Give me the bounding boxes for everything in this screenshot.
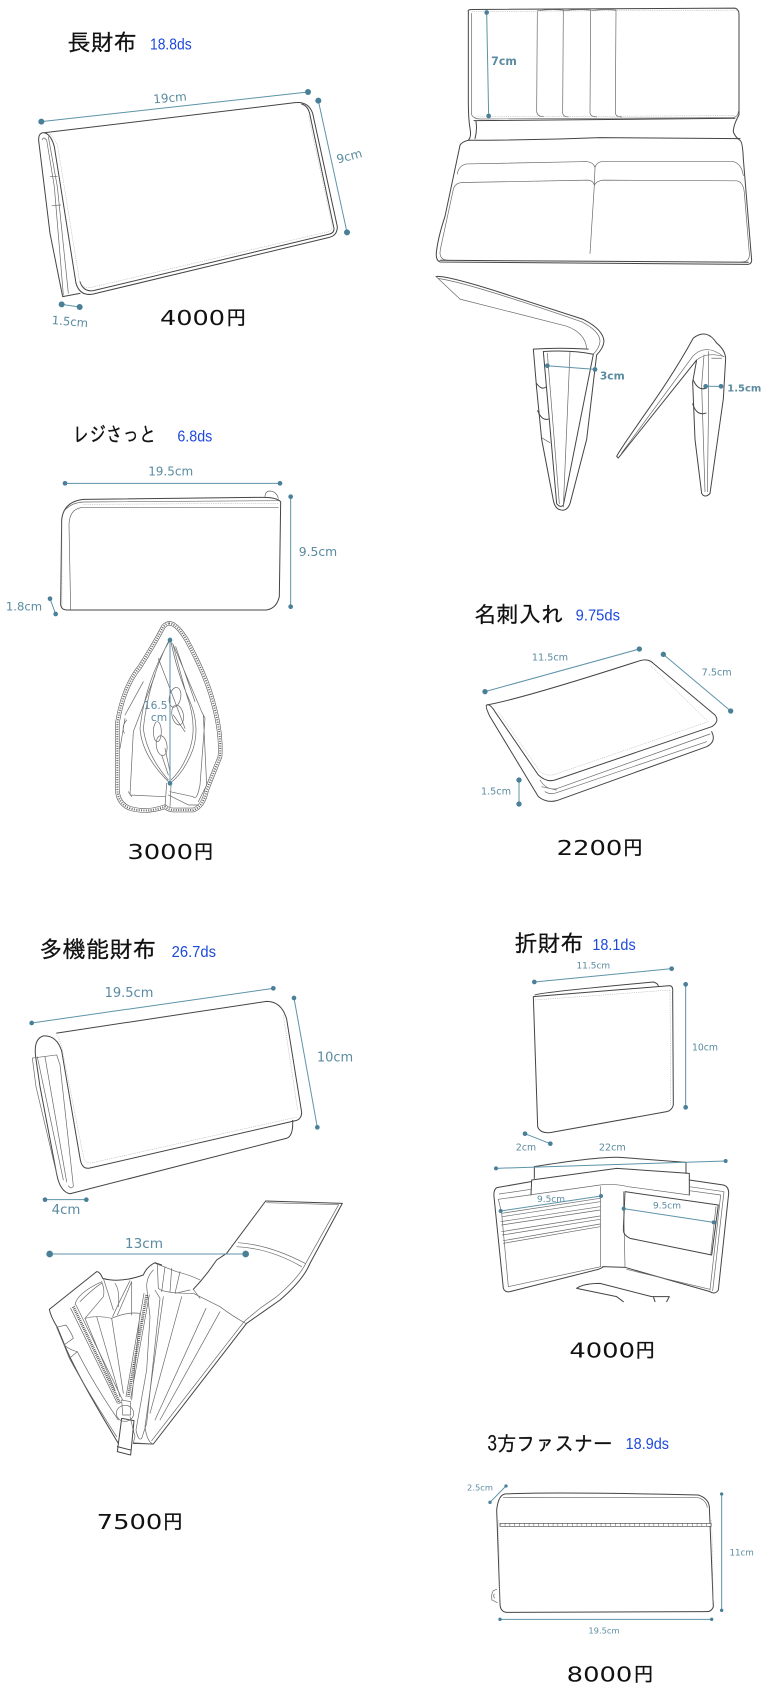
dimension: 1.5cm: 1.5cm bbox=[51, 313, 89, 330]
price: 4000 yen bbox=[569, 1338, 656, 1362]
dimension: 1.5cm side bbox=[703, 383, 761, 394]
dimension: 9.5cm right: 9.5cm bbox=[653, 1201, 681, 1211]
panel: three-sided zip wallet bbox=[467, 1434, 754, 1684]
heading: three-sided zip wallet: 3方ファスナー bbox=[487, 1434, 612, 1454]
drawing: side view open bbox=[436, 276, 604, 510]
drawing: fanned wallet right half and flap bbox=[133, 1201, 342, 1444]
panel: long wallet bbox=[38, 31, 364, 330]
heading: three-sided zip wallet: 18.9ds bbox=[626, 1436, 669, 1453]
dimension: 19.5cm: 19.5cm bbox=[148, 465, 193, 479]
dimension: 19cm bbox=[38, 89, 311, 125]
heading: multifunction wallet: 26.7ds bbox=[172, 944, 216, 961]
heading: L-zip wallet bbox=[73, 424, 213, 445]
price: 2200 yen: 円 bbox=[623, 838, 643, 858]
dimension: 19.5cm bbox=[498, 1618, 713, 1635]
heading: L-zip wallet: 6.8ds bbox=[177, 428, 213, 445]
dimension: 13cm bbox=[46, 1236, 249, 1257]
dimension: 1.8cm: 1.8cm bbox=[6, 599, 42, 613]
dimension: 10cm bbox=[292, 996, 353, 1130]
dimension: 10cm: 10cm bbox=[692, 1043, 718, 1054]
dimension: 9.5cm left bbox=[499, 1194, 603, 1213]
dimension: 7cm bbox=[484, 10, 517, 118]
dimension: 11.5cm: 11.5cm bbox=[532, 652, 568, 663]
heading: card case: 9.75ds bbox=[576, 608, 620, 625]
price: 3000 yen: 3000 bbox=[127, 840, 193, 864]
dimension: 1.5cm: 1.5cm bbox=[481, 786, 511, 797]
dimension: 22cm: 22cm bbox=[599, 1143, 626, 1154]
price: 4000 yen: 円 bbox=[635, 1340, 656, 1360]
dimension: 19.5cm bbox=[63, 465, 282, 486]
dimension: 9cm: 9cm bbox=[335, 146, 364, 166]
dimension: 7.5cm bbox=[661, 652, 733, 714]
dimension: 19.5cm bbox=[29, 986, 276, 1025]
price: 8000 yen bbox=[567, 1663, 654, 1684]
price: 4000 yen: 4000 bbox=[160, 306, 225, 330]
dimension: 16.5cm: cm bbox=[151, 711, 167, 724]
heading: multifunction wallet: 多機能財布 bbox=[39, 937, 156, 960]
dimension: 19.5cm: 19.5cm bbox=[588, 1625, 620, 1635]
heading: long wallet: 長財布 bbox=[68, 31, 137, 54]
dimension: 13cm: 13cm bbox=[125, 1236, 163, 1252]
drawing: three-sided zip wallet bbox=[492, 1493, 713, 1612]
panel: bifold wallet bbox=[494, 932, 729, 1362]
dimension: 11.5cm bbox=[532, 962, 674, 984]
drawing: L-zip wallet opened bbox=[117, 623, 220, 810]
drawing: open long wallet bbox=[436, 8, 752, 264]
dimension: 7cm: 7cm bbox=[491, 55, 517, 68]
dimension: 1.5cm bbox=[481, 777, 522, 807]
heading: bifold wallet: 折財布 bbox=[514, 932, 583, 955]
dimension: 1.5cm bbox=[51, 301, 89, 330]
heading: card case: 名刺入れ bbox=[474, 602, 563, 625]
panel: multifunction wallet bbox=[29, 937, 353, 1534]
dimension: 19cm: 19cm bbox=[153, 90, 187, 106]
dimension: 11cm: 11cm bbox=[730, 1549, 754, 1559]
panel: card case bbox=[474, 602, 733, 860]
drawing: fanned wallet left half and zipper bbox=[49, 1263, 162, 1455]
heading: L-zip wallet: レジさっと bbox=[73, 424, 156, 445]
dimension: 2cm: 2cm bbox=[516, 1143, 536, 1154]
dimension: 2cm bbox=[516, 1131, 553, 1154]
drawing: closed L-zip wallet bbox=[61, 491, 281, 610]
dimension: 2.5cm bbox=[467, 1483, 508, 1504]
price: 7500 yen bbox=[97, 1510, 183, 1534]
drawing: closed bifold wallet bbox=[533, 982, 673, 1133]
heading: long wallet bbox=[68, 31, 192, 54]
price: 7500 yen: 円 bbox=[163, 1512, 183, 1532]
dimension: 11.5cm: 11.5cm bbox=[576, 962, 610, 972]
dimension: 4cm: 4cm bbox=[52, 1203, 80, 1218]
dimension: 3cm: 3cm bbox=[600, 370, 625, 383]
dimension: 1.8cm bbox=[6, 596, 58, 616]
price: 4000 yen: 円 bbox=[226, 308, 247, 328]
heading: multifunction wallet bbox=[39, 937, 216, 961]
dimension: 3cm bbox=[545, 363, 625, 383]
price: 3000 yen: 円 bbox=[193, 842, 214, 862]
price: 4000 yen bbox=[160, 306, 247, 330]
dimension: 9.5cm left: 9.5cm bbox=[537, 1195, 565, 1205]
heading: card case bbox=[474, 602, 620, 625]
price: 3000 yen bbox=[127, 840, 214, 864]
dimension: 9.5cm bbox=[288, 494, 337, 609]
dimension: 2.5cm: 2.5cm bbox=[467, 1483, 493, 1493]
drawing: closed long wallet bbox=[39, 102, 337, 297]
drawing: side view folded bbox=[617, 334, 726, 496]
dimension: 9.5cm right bbox=[622, 1201, 716, 1224]
dimension: 11cm bbox=[720, 1492, 754, 1612]
dimension: 4cm bbox=[43, 1197, 89, 1218]
dimension: 9cm bbox=[315, 98, 364, 235]
panel: long wallet open and side views bbox=[436, 8, 761, 510]
dimension: 22cm bbox=[494, 1143, 728, 1170]
heading: bifold wallet bbox=[514, 932, 636, 955]
dimension: 9.5cm: 9.5cm bbox=[299, 545, 337, 559]
dimension: 10cm bbox=[683, 982, 718, 1110]
price: 7500 yen: 7500 bbox=[97, 1510, 162, 1534]
dimension: 16.5cm: 16.5 bbox=[144, 699, 168, 712]
heading: bifold wallet: 18.1ds bbox=[592, 937, 636, 954]
price: 4000 yen: 4000 bbox=[569, 1338, 635, 1362]
dimension: 1.5cm side: 1.5cm bbox=[727, 383, 761, 394]
panel: L-zip wallet bbox=[6, 424, 337, 864]
dimension: 10cm: 10cm bbox=[317, 1050, 353, 1065]
drawing: open bifold wallet bbox=[494, 1157, 729, 1302]
dimension: 7.5cm: 7.5cm bbox=[702, 667, 732, 678]
price: 2200 yen bbox=[557, 836, 643, 860]
dimension: 16.5cm bbox=[144, 638, 172, 786]
heading: long wallet: 18.8ds bbox=[150, 36, 192, 53]
dimension: 11.5cm bbox=[482, 646, 642, 694]
price: 2200 yen: 2200 bbox=[557, 836, 622, 860]
drawing: card case bbox=[486, 660, 717, 801]
dimension: 19.5cm: 19.5cm bbox=[105, 986, 153, 1001]
drawing: closed multifunction wallet bbox=[32, 1001, 302, 1194]
